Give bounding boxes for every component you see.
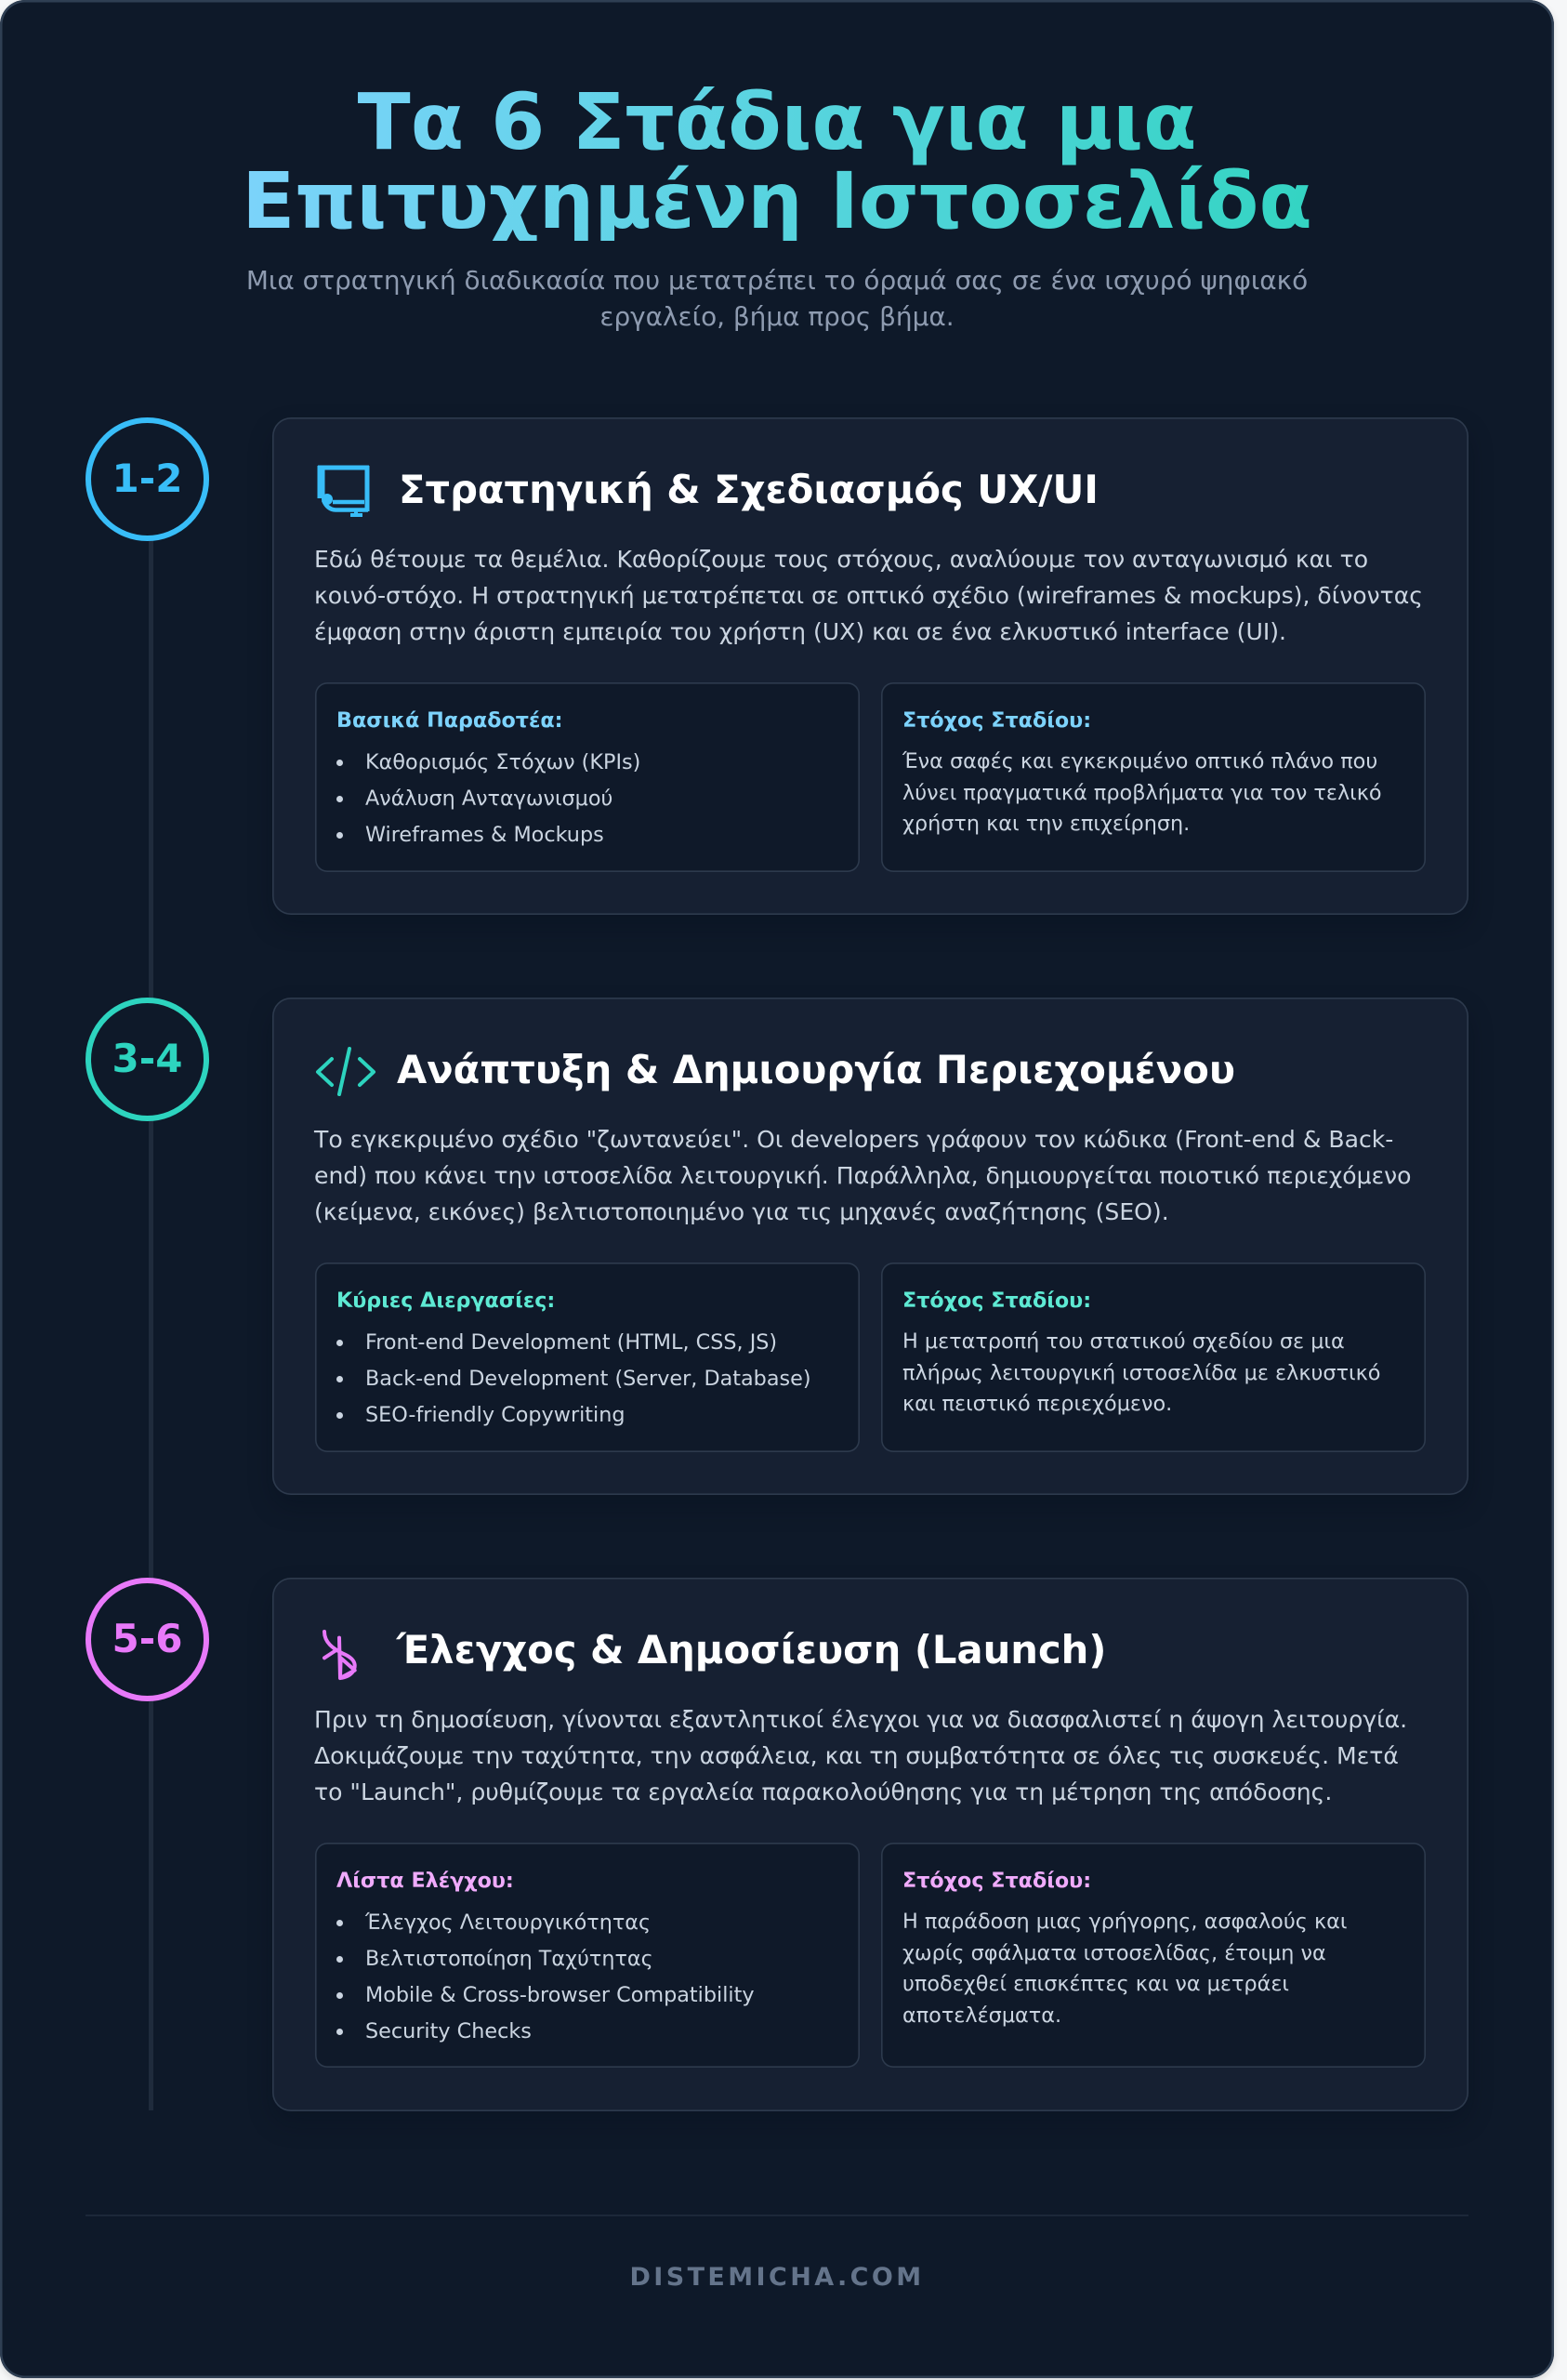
icon: launch tools [322,1630,357,1681]
goal text: χωρίς σφάλματα ιστοσελίδας, έτοιμη να [902,1941,1326,1965]
description: Πριν τη δημοσίευση, γίνονται εξαντλητικοί έλεγχοι για να διασφαλιστεί η άψογη λειτουργία. [314,1705,1407,1733]
description: Δοκιμάζουμε την ταχύτητα, την ασφάλεια, και τη συμβατότητα σε όλες τις συσκευές. Μετά [314,1742,1399,1769]
list: Καθορισμός Στόχων (KPIs) [365,750,640,774]
subtitle: Μια στρατηγική διαδικασία που μετατρέπει το όραμά σας σε ένα ισχυρό ψηφιακό [246,264,1308,296]
panel: development and content creation [272,998,1468,1495]
footer brand: DISTEMICHA.COM [630,2263,924,2291]
title: Επιτυχημένη Ιστοσελίδα [242,155,1312,246]
stage badge 3-4 [86,998,209,1121]
description: end) που κάνει την ιστοσελίδα λειτουργική. Παράλληλα, δημιουργείται ποιοτικό περιεχόμενο [314,1162,1412,1189]
subtitle [246,264,1308,331]
description: Το εγκεκριμένο σχέδιο "ζωντανεύει". Οι developers γράφουν τον κώδικα (Front-end & Back- [314,1125,1393,1153]
list: Back-end Development (Server, Database) [365,1367,811,1391]
description [314,545,1423,645]
goal text: λύνει πραγματικά προβλήματα για τον τελικό [902,781,1382,805]
description: το "Launch", ρυθμίζουμε τα εργαλεία παρακολούθησης για τη μέτρηση της απόδοσης. [314,1778,1332,1805]
icon: monitor [318,465,370,517]
box heading: Κύριες Διεργασίες: [336,1289,555,1313]
stage badge 1-2 [86,417,209,541]
box heading: Λίστα Ελέγχου: [336,1869,514,1893]
box heading: Στόχος Σταδίου: [902,1289,1091,1313]
box heading: Βασικά Παραδοτέα: [336,708,563,733]
list [336,750,640,847]
goal text: Η παράδοση μιας γρήγορης, ασφαλούς και [902,1910,1347,1934]
box: stage goal [881,1263,1426,1452]
stage badge 5-6: 5-6 [112,1616,182,1661]
goal text: Ένα σαφές και εγκεκριμένο οπτικό πλάνο που [902,749,1377,774]
box: key deliverables [315,682,860,872]
box: main processes [315,1263,860,1452]
panel: strategy and UX/UI design [272,417,1468,915]
goal text: Η μετατροπή του στατικού σχεδίου σε μια [902,1329,1345,1354]
goal text: αποτελέσματα. [902,2003,1061,2027]
box: checklist [315,1843,860,2068]
description: (κείμενα, εικόνες) βελτιστοποιημένο για τις μηχανές αναζήτησης (SEO). [314,1198,1169,1225]
timeline line [149,479,152,2110]
list [336,1911,755,2043]
icon: code [316,1047,375,1096]
box: stage goal [881,1843,1426,2068]
title [242,76,1312,246]
goal text: πλήρως λειτουργική ιστοσελίδα με ελκυστικό [902,1361,1380,1385]
list: Βελτιστοποίηση Ταχύτητας [365,1947,653,1971]
list: SEO-friendly Copywriting [365,1403,625,1427]
stage badge 1-2: 1-2 [112,456,182,501]
stage badge 5-6 [86,1578,209,1701]
description: έμφαση στην άριστη εμπειρία του χρήστη (UX) και σε ένα ελκυστικό interface (UI). [314,618,1286,645]
list: Έλεγχος Λειτουργικότητας [365,1911,651,1935]
panel: testing and launch [272,1578,1468,2111]
box heading: Στόχος Σταδίου: [902,708,1091,733]
goal text: υποδεχθεί επισκέπτες και να μετράει [902,1972,1289,1996]
list: Ανάλυση Ανταγωνισμού [365,787,612,811]
box: stage goal [881,682,1426,872]
description: κοινό-στόχο. Η στρατηγική μετατρέπεται σε οπτικό σχέδιο (wireframes & mockups), δίνοντας [314,582,1423,609]
list: Security Checks [365,2019,532,2043]
goal text [902,1329,1380,1416]
list [336,1330,811,1427]
description [314,1125,1412,1225]
list: Wireframes & Mockups [365,823,604,847]
goal text [902,1910,1347,2027]
heading: Ανάπτυξη & Δημιουργία Περιεχομένου [397,1047,1235,1092]
goal text: χρήστη και την επιχείρηση. [902,812,1190,836]
title: Τα 6 Στάδια για μια [358,76,1196,167]
stage badge 3-4: 3-4 [112,1036,182,1081]
goal text [902,749,1382,836]
goal text: και πειστικό περιεχόμενο. [902,1392,1172,1416]
description: Εδώ θέτουμε τα θεμέλια. Καθορίζουμε τους στόχους, αναλύουμε τον ανταγωνισμό και το [314,545,1368,573]
list: Mobile & Cross-browser Compatibility [365,1983,755,2007]
subtitle: εργαλείο, βήμα προς βήμα. [599,301,955,331]
heading: Έλεγχος & Δημοσίευση (Launch) [397,1627,1106,1673]
heading: Στρατηγική & Σχεδιασμός UX/UI [399,467,1099,512]
box heading: Στόχος Σταδίου: [902,1869,1091,1893]
list: Front-end Development (HTML, CSS, JS) [365,1330,777,1355]
description [314,1705,1407,1805]
